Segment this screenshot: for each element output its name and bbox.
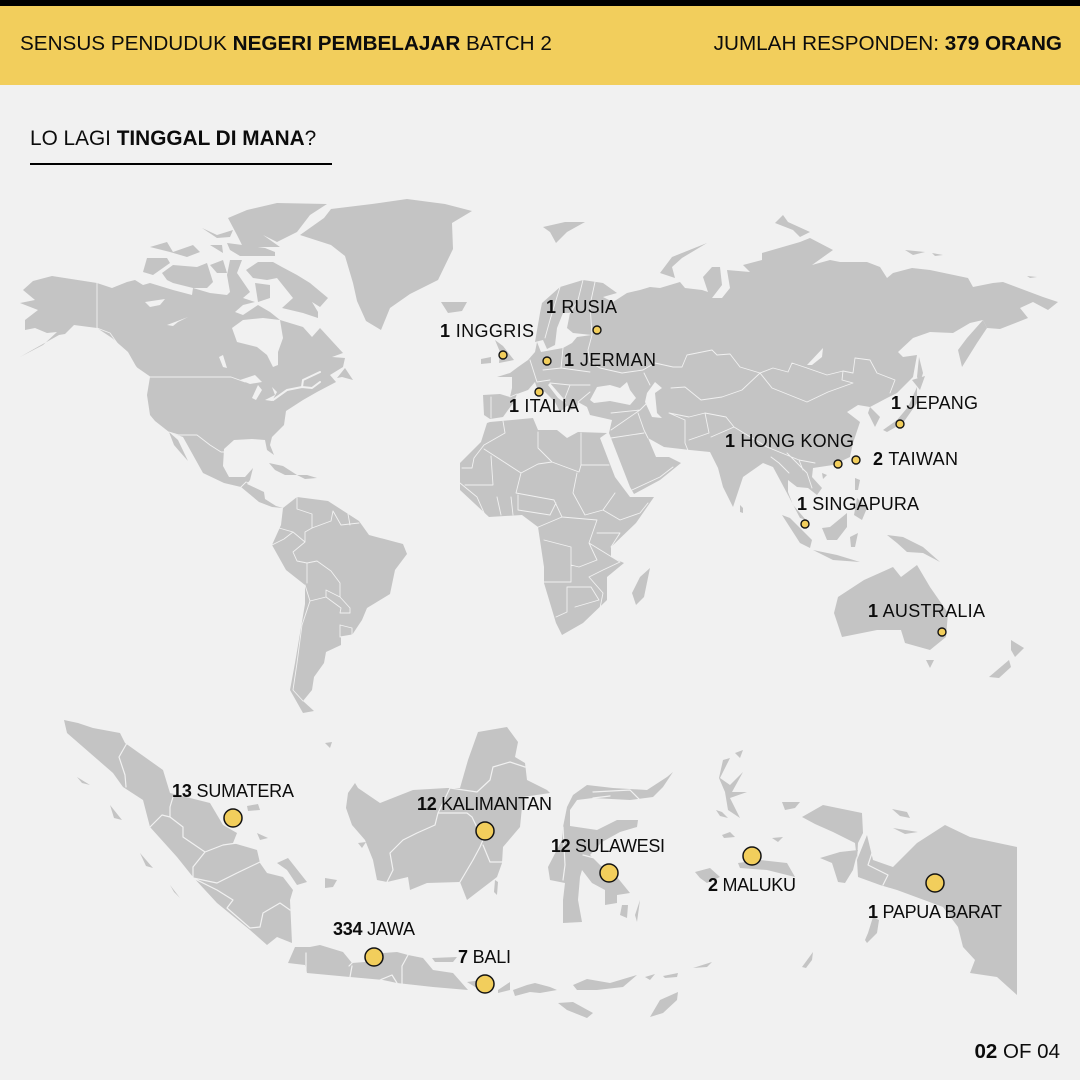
marker and label: maluku: [708, 847, 796, 895]
marker and label: bali: [458, 947, 511, 993]
sumatera: [64, 720, 337, 945]
data points: abroad: [440, 297, 985, 636]
marker and label: sulawesi: 12 SULAWESI: [551, 836, 665, 856]
bali and nusa tenggara: [467, 952, 813, 1018]
marker and label: sumatera: 13 SUMATERA: [172, 781, 294, 801]
africa land: [460, 418, 654, 635]
marker and label: jerman: 1 JERMAN: [564, 350, 656, 370]
marker and label: papua barat: [868, 874, 1002, 922]
south america land: [272, 497, 407, 713]
header title: SENSUS PENDUDUK NEGERI PEMBELAJAR BATCH 2: [20, 32, 552, 55]
maluku: [695, 750, 795, 883]
header band: [0, 6, 1080, 85]
marker and label: rusia: 1 RUSIA: [546, 297, 617, 317]
marker and label: singapura: 1 SINGAPURA: [797, 494, 919, 514]
marker and label: kalimantan: 12 KALIMANTAN: [417, 794, 552, 814]
marker and label: bali: 7 BALI: [458, 947, 511, 967]
world map: [20, 199, 1058, 713]
marker and label: jawa: 334 JAWA: [333, 919, 415, 939]
eurasia land: [481, 215, 1058, 520]
greenland land: [300, 199, 472, 330]
page number: 02 OF 04: [975, 1040, 1060, 1063]
marker and label: sumatera: [172, 781, 294, 827]
north america land: [20, 203, 353, 508]
papua: [782, 802, 1017, 995]
marker and label: maluku: 2 MALUKU: [708, 875, 796, 895]
section heading: [30, 126, 332, 165]
marker and label: rusia: [546, 297, 617, 334]
marker and label: inggris: 1 INGGRIS: [440, 321, 534, 341]
maritime southeast asia land: [782, 513, 940, 562]
kalimantan: [346, 727, 550, 900]
top black bar: [0, 0, 1080, 6]
australia and new zealand land: [834, 565, 1024, 678]
marker and label: taiwan: 2 TAIWAN: [873, 449, 958, 469]
data points: indonesia: [172, 781, 1002, 993]
respondent count: JUMLAH RESPONDEN: 379 ORANG: [714, 32, 1062, 55]
marker and label: singapura: [797, 494, 919, 528]
indonesia map: [64, 720, 1017, 1018]
marker and label: australia: [868, 601, 985, 636]
marker and label: italia: 1 ITALIA: [509, 396, 579, 416]
marker and label: jepang: [891, 393, 978, 428]
marker and label: jawa: [333, 919, 415, 966]
jawa: [288, 945, 468, 990]
marker and label: inggris: [440, 321, 534, 359]
section heading: LO LAGI TINGGAL DI MANA?: [30, 127, 316, 150]
marker and label: jepang: 1 JEPANG: [891, 393, 978, 413]
marker and label: hong kong: [725, 431, 854, 468]
marker and label: hong kong: 1 HONG KONG: [725, 431, 854, 451]
marker and label: kalimantan: [417, 794, 552, 840]
sulawesi: [548, 772, 673, 923]
iceland land: [441, 302, 467, 313]
marker and label: papua barat: 1 PAPUA BARAT: [868, 902, 1002, 922]
marker and label: sulawesi: [551, 836, 665, 882]
marker and label: australia: 1 AUSTRALIA: [868, 601, 985, 621]
